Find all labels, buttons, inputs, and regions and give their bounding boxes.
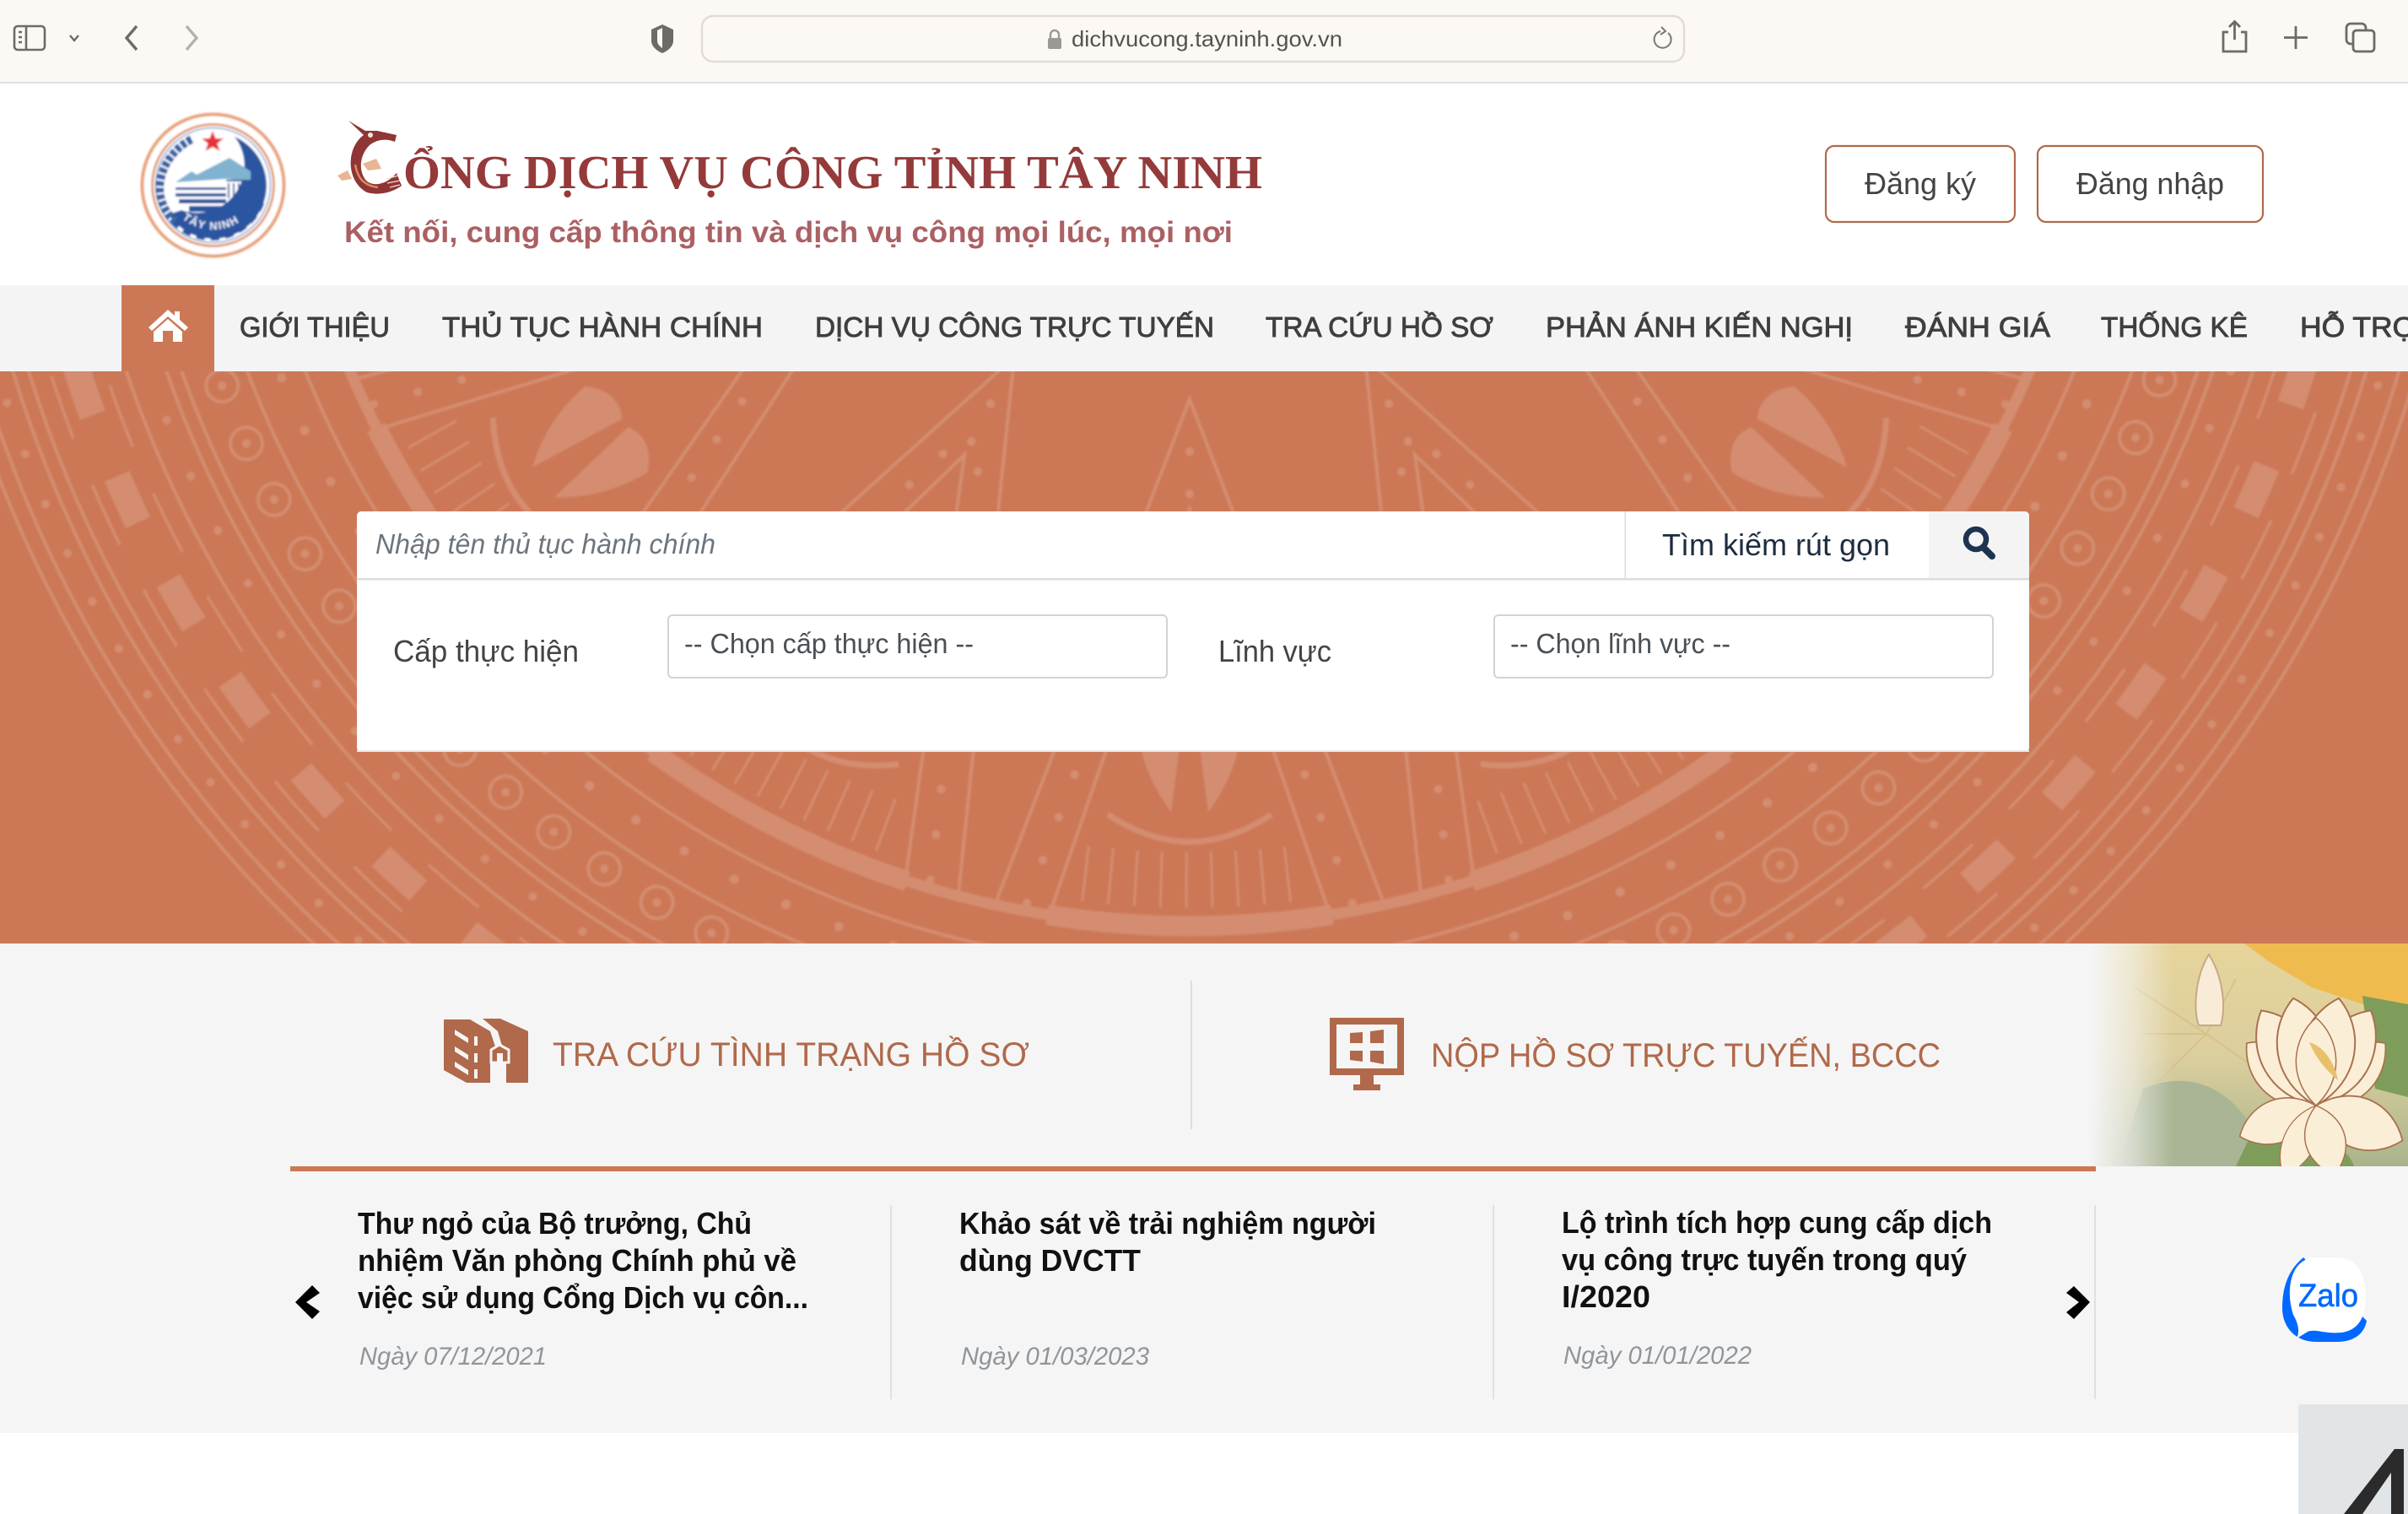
icon: sidebar toggle: [14, 26, 45, 50]
icon: forward arrow: [186, 26, 197, 50]
url text: dichvucong.tayninh.gov.vn: [1072, 26, 1342, 51]
news card 3: [1562, 1205, 1992, 1370]
shortcut: look up dossier status: [444, 1019, 1029, 1083]
corner widget: [2298, 1404, 2408, 1514]
date: Ngày 07/12/2021: [359, 1343, 547, 1371]
nav home tab: [121, 285, 214, 371]
search panel: [357, 511, 2029, 752]
zalo wordmark: Zalo: [2298, 1279, 2358, 1314]
icon: reload: [1655, 27, 1671, 48]
date: Ngày 01/01/2022: [1563, 1342, 1752, 1370]
logo lettering: TÂY NINH: [182, 212, 240, 231]
nav item: TRA CỨU HỒ SƠ: [1266, 311, 1493, 343]
headline line: Thư ngỏ của Bộ trưởng, Chủ: [358, 1206, 752, 1241]
headline line: I/2020: [1562, 1279, 1650, 1314]
logo star: [202, 131, 224, 151]
site title: [337, 121, 1262, 199]
icon: home: [148, 310, 188, 342]
headline line: vụ công trực tuyến trong quý: [1562, 1242, 1967, 1277]
headline line: nhiệm Văn phòng Chính phủ về: [358, 1243, 796, 1278]
navigation bar: [0, 285, 2408, 371]
icon: sidebar chevron: [70, 35, 78, 41]
headline line: việc sử dụng Cổng Dịch vụ côn...: [358, 1280, 808, 1315]
shortcut label: TRA CỨU TÌNH TRẠNG HỒ SƠ: [553, 1035, 1029, 1073]
browser toolbar: [0, 0, 2408, 84]
shortcut: submit online: [1330, 1018, 1941, 1090]
level dropdown: -- Chọn cấp thực hiện --: [684, 628, 974, 659]
news card 1: [358, 1206, 808, 1371]
site header: [139, 111, 2265, 259]
quick search label: Tìm kiếm rút gọn: [1662, 527, 1890, 562]
url bar: [702, 16, 1684, 62]
nav item: PHẢN ÁNH KIẾN NGHỊ: [1546, 311, 1853, 343]
button: register: [1826, 146, 2015, 222]
orange divider: [290, 1166, 2096, 1171]
headline line: Khảo sát về trải nghiệm người: [959, 1206, 1376, 1241]
search placeholder: Nhập tên thủ tục hành chính: [375, 528, 715, 560]
site slogan: Kết nối, cung cấp thông tin và dịch vụ công mọi lúc, mọi nơi: [344, 216, 1233, 249]
lotus bud: [2195, 954, 2223, 1025]
icon: monitor: [1330, 1018, 1404, 1090]
button: register: Đăng ký: [1865, 166, 1976, 201]
shortcut label: NỘP HỒ SƠ TRỰC TUYẾN, BCCC: [1431, 1035, 1941, 1074]
field dropdown: [1494, 615, 1993, 678]
nav item: DỊCH VỤ CÔNG TRỰC TUYẾN: [815, 311, 1214, 343]
arrow: carousel previous: [295, 1285, 320, 1319]
lower services section: [0, 944, 2408, 1433]
nav item: THỦ TỤC HÀNH CHÍNH: [442, 311, 763, 343]
button: login: Đăng nhập: [2076, 166, 2224, 201]
nav item: GIỚI THIỆU: [240, 311, 390, 343]
icon: lock: [1048, 30, 1061, 49]
button: login: [2038, 146, 2263, 222]
icon: share: [2223, 22, 2246, 51]
field label: Lĩnh vực: [1218, 634, 1331, 668]
icon: Zalo chat button: [2282, 1257, 2367, 1342]
icon: magnifier: [1966, 529, 1992, 556]
search button: [1929, 511, 2029, 578]
level dropdown: [668, 615, 1167, 678]
nav item: THỐNG KÊ: [2101, 311, 2248, 343]
icon: back arrow: [127, 26, 137, 50]
news card 2: [959, 1206, 1376, 1371]
icon: tabs overview: [2346, 24, 2374, 51]
headline line: Lộ trình tích hợp cung cấp dịch: [1562, 1205, 1992, 1240]
icon: building: [444, 1019, 528, 1083]
icon: new tab plus: [2284, 26, 2308, 49]
level label: Cấp thực hiện: [393, 634, 579, 668]
hero banner with bronze drum pattern: [0, 371, 2408, 944]
ornament: dragon C letterform: [337, 121, 402, 194]
headline line: dùng DVCTT: [959, 1243, 1141, 1278]
nav item: ĐÁNH GIÁ: [1905, 311, 2050, 343]
nav item: HỖ TRỢ: [2300, 311, 2408, 343]
title text: ỔNG DỊCH VỤ CÔNG TỈNH TÂY NINH: [403, 145, 1262, 199]
icon: privacy shield: [651, 24, 673, 53]
illustration: lotus painting: [2089, 944, 2408, 1181]
logo: Tay Ninh emblem: [139, 111, 287, 259]
lotus flower: [2239, 998, 2403, 1166]
arrow: carousel next: [2066, 1286, 2090, 1319]
field dropdown: -- Chọn lĩnh vực --: [1510, 628, 1730, 659]
date: Ngày 01/03/2023: [961, 1343, 1149, 1371]
